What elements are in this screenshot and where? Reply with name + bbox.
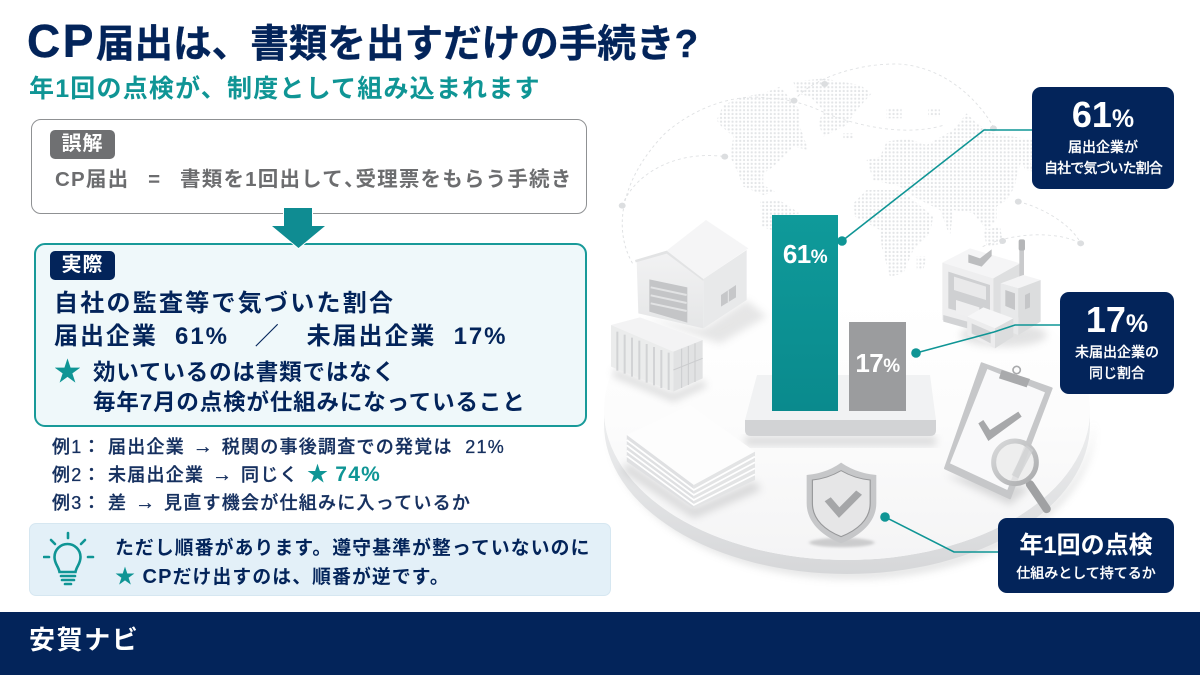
icon: shipping container bbox=[611, 317, 707, 402]
note text: ただし順番があります。遵守基準が整っていないのに bbox=[115, 537, 591, 558]
title: CP届出は、書類を出すだけの手続き? bbox=[27, 15, 698, 67]
panel: note bbox=[29, 523, 611, 596]
callout: 61% bbox=[1032, 87, 1174, 189]
callout caption bbox=[1075, 344, 1159, 380]
arrow bbox=[272, 208, 325, 249]
label: misconception: 誤解 bbox=[62, 133, 104, 155]
callout caption bbox=[1044, 139, 1163, 176]
bar: 17% bbox=[849, 322, 906, 411]
reality headline: 自社の監査等で気づいた割合 bbox=[54, 290, 395, 317]
reality takeaway bbox=[93, 360, 526, 415]
callout value: 61% bbox=[1072, 94, 1134, 135]
callout line: 61% bbox=[837, 130, 1032, 246]
callout: annual check bbox=[998, 518, 1174, 593]
example 1: 例1： 届出企業 → 税関の事後調査での発覚は 21% bbox=[52, 436, 505, 458]
bar label: 17%: 17% bbox=[855, 348, 900, 378]
icon: stack of papers bbox=[623, 405, 761, 518]
reality takeaway: 効いているのは書類ではなく bbox=[93, 360, 396, 385]
callout heading: 年1回の点検 bbox=[1019, 532, 1153, 559]
note text: ★ CPだけ出すのは、順番が逆です。 bbox=[115, 566, 450, 588]
misconception text: CP届出 = 書類を1回出して、受理票をもらう手続き bbox=[55, 168, 572, 191]
callout caption: 同じ割合 bbox=[1089, 364, 1145, 380]
round platform bbox=[604, 260, 1094, 579]
callout line: annual check bbox=[880, 512, 998, 552]
icon: factory bbox=[942, 239, 1047, 348]
callout line: 17% bbox=[911, 325, 1060, 358]
callout caption: 仕組みとして持てるか bbox=[1016, 565, 1156, 581]
bar label: 61%: 61% bbox=[783, 239, 827, 269]
example 3: 例3： 差 → 見直す機会が仕組みに入っているか bbox=[52, 492, 471, 514]
icon: light bulb bbox=[43, 532, 94, 586]
label: reality: 実際 bbox=[62, 254, 104, 276]
icon: warehouse bbox=[635, 220, 767, 343]
brand name: 安賀ナビ bbox=[29, 625, 139, 655]
callout: 17% bbox=[1060, 292, 1174, 394]
reality takeaway: 毎年7月の点検が仕組みになっていること bbox=[93, 390, 526, 415]
icon: star: ★ bbox=[54, 357, 81, 387]
subtitle: 年1回の点検が、制度として組み込まれます bbox=[29, 75, 541, 103]
callout caption: 未届出企業の bbox=[1075, 344, 1159, 360]
panel: misconception bbox=[31, 119, 587, 214]
bar: 61% bbox=[772, 215, 838, 411]
label: reality bbox=[50, 251, 115, 280]
footer band bbox=[0, 612, 1200, 675]
callout value: 17% bbox=[1086, 299, 1148, 340]
dashed route arcs bbox=[619, 64, 1084, 263]
panel: reality bbox=[34, 243, 587, 427]
reality figures: 届出企業 61% ／ 未届出企業 17% bbox=[54, 323, 507, 350]
example 2: 例2： 未届出企業 → 同じく ★ 74% bbox=[52, 463, 381, 486]
icon: shield with check bbox=[807, 463, 876, 547]
callout caption: 届出企業が bbox=[1068, 139, 1138, 155]
icon: clipboard and magnifier bbox=[945, 363, 1052, 509]
callout caption: 自社で気づいた割合 bbox=[1044, 160, 1162, 176]
note text bbox=[115, 537, 591, 588]
dotted world map bbox=[717, 78, 1033, 277]
bar chart base bbox=[745, 375, 936, 446]
label: misconception bbox=[50, 130, 115, 159]
